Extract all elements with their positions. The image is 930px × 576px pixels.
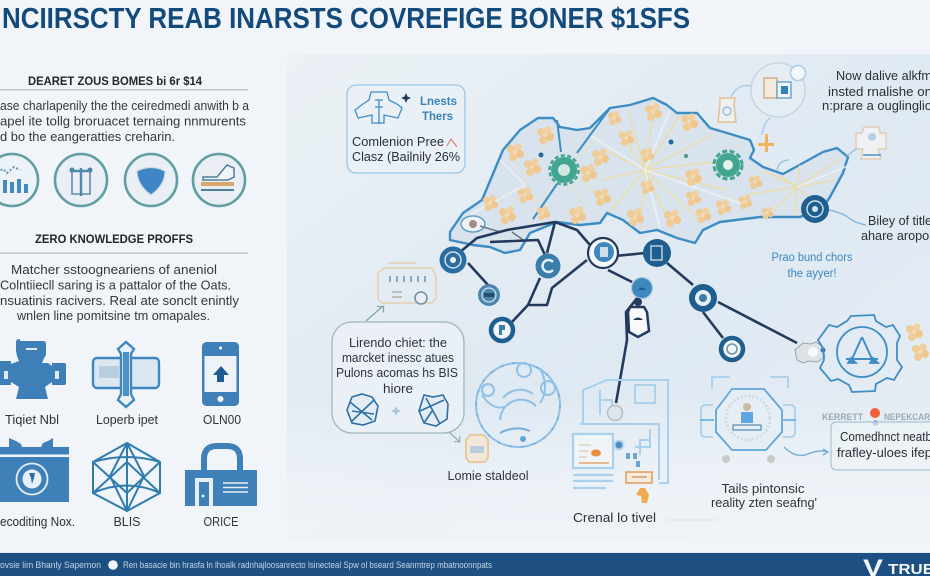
panel: map diagram [287,54,930,540]
icon: safe [0,438,69,502]
callout: top left [347,85,465,173]
label: ecoditing nox: ecoditing Nox. [0,515,75,529]
map pin [461,216,526,242]
icon: bar chart badge [0,154,38,206]
icon: top right circle [731,63,806,135]
icon: building [355,92,402,124]
arrow: callout to jar [449,432,460,442]
orange tag [626,472,652,483]
leader line: right lobe note [829,210,866,225]
icon: padlock node [628,298,649,337]
text: callout body: frafley-uloes ifep [837,446,930,460]
text: octagon caption: Tails pintonsic [722,482,804,496]
radial spokes [600,100,838,230]
text block: first section: ase charlapenily the the ceiredmedi anwith b a [0,99,249,113]
text block: zero knowledge proofs [0,263,240,323]
icon: phone [202,342,239,406]
icon: crystal left [347,394,378,425]
icon: red mark [447,139,457,147]
icon: orange cross [758,134,774,152]
text: top right note: insted rnalishe on [828,85,930,99]
text: octagon caption: reality zten seafng' [711,496,817,510]
text: right lobe note: Biley of title [868,214,930,228]
orange icon [636,488,649,503]
text: right lobe note [861,214,930,243]
panel: left column [0,74,257,529]
map shape [450,98,850,253]
network nodes [440,195,829,360]
text block: zero knowledge proofs: wnlen line pomitsine tm omapales. [16,309,210,323]
footer text long: Ren basacie bin hrasfa ln lhoalk radnhajloosanrecto lsinecteal Spw ol bseard Seanmtrep mbatnoonnpats [123,560,492,570]
green hub: left [550,156,578,184]
footer text left: ovsie lim Bhanly Sapernon [0,560,101,570]
text: top right note: n:prare a ouglinglio [822,99,930,113]
arrow: octagon to callout [784,447,828,455]
text: callout body: marcket inessc atues [342,351,454,365]
text block: zero knowledge proofs: Colntiiecll saring is a pattalor of the Oats. [0,278,231,292]
diagram: circular globe [476,363,560,447]
icon: lock with door [185,446,257,506]
labels: small caps: KERRETT [822,412,863,422]
text: octagon caption [711,482,817,510]
node: map right [801,195,829,223]
text block: zero knowledge proofs: Matcher sstoogneariens of aneniol [11,263,217,277]
node 3 [536,254,560,278]
node 9 [721,338,743,360]
text: callout body: hiore [383,382,413,396]
network connector lines [460,222,797,403]
text: blue note: Prao bund chors [772,252,853,264]
diagram: octagon device [700,377,796,463]
labels: small caps [822,412,930,422]
node 7 [632,278,652,298]
arrow: right lobe curve [777,160,789,170]
node 8 [689,284,717,312]
label: loperb ipet: Loperb ipet [96,413,159,427]
footer bar [0,552,930,576]
callout: bottom right [822,408,930,470]
heading: zero knowledge proofs: ZERO KNOWLEDGE PROFFS [35,232,193,246]
label: blis: BLIS [114,515,140,529]
node 1 [440,246,466,274]
icon: polyhedron [93,443,160,511]
text: top right note [822,69,930,113]
icon: tan jar top [718,98,736,122]
text: top right note: Now dalive alkfm [836,69,930,83]
icon: tan hotel [378,263,436,304]
text: blue note [772,252,853,280]
diagram: device schematic [573,380,668,503]
label: lomie staldeol: Lomie staldeol [448,469,528,483]
text block: first section [0,99,249,144]
text: callout body: Comlenion Pree [352,135,444,149]
label: orice: ORICE [204,515,238,529]
icon: tan jar [466,435,488,462]
text block: first section: apel ite tollg broruacet ternaing nnmurents [0,114,246,128]
text: callout body: Clasz (Bailnily 26% [352,150,460,164]
text: callout body: Lirendo chiet: the [349,336,447,350]
pin [608,406,622,420]
icon: small star [391,406,401,416]
arrow: callout to hotel [366,306,384,321]
node 2 [478,284,500,306]
label: oln00: OLN00 [203,413,241,427]
text: blue note: the ayyer! [788,268,836,280]
text: right lobe note: ahare aropol [861,229,930,243]
label: lnests thers [420,96,457,123]
text: callout body [336,336,458,396]
tan clusters [483,103,773,227]
icon: footer bubble [108,560,118,570]
icon: star [401,93,411,103]
orange chart mark [591,450,601,456]
icon row: circular badges [0,154,245,206]
icon: tan figure [856,127,886,159]
callout: centre left [332,322,464,433]
text block: zero knowledge proofs: nsuatinis racivers. Real ate sonclt enintly [0,294,240,308]
heading: first section: DEARET ZOUS BOMES bi 6r $14 [28,74,202,88]
label: lnests thers: Lnests [420,96,457,108]
label: crenal lo tivel: Crenal lo tivel [573,511,656,525]
icon: cross connector [0,339,66,399]
icon: shield badge [125,154,177,206]
text block: first section: d bo the eangeratties creharin. [0,130,175,144]
icon: gear [818,315,902,392]
node 5 [588,238,618,268]
text: callout body [352,135,460,164]
node 4 [491,319,513,341]
icon: tan clusters right [906,323,929,361]
icon: book and scales badge [55,154,107,206]
icon: crystal right [419,395,448,426]
title: NCIIRSCTY REAB INARSTS COVREFIGE BONER $1SFS [2,3,690,35]
icon: gray blob [795,342,826,363]
icon grid [0,339,257,529]
lobe dividers [533,108,610,219]
icon: shoe badge [193,154,245,206]
label: tiqiet nbl: Tiqiet Nbl [5,413,59,427]
green hub: right [714,151,742,179]
icon: red dot [870,408,880,418]
text: callout body [837,430,930,460]
text: callout body: Pulons acomas hs BIS [336,366,458,380]
icon: pipe cross [93,342,159,407]
footer logo [863,555,930,576]
node 6 [643,239,671,267]
label: lnests thers: Thers [422,111,453,123]
